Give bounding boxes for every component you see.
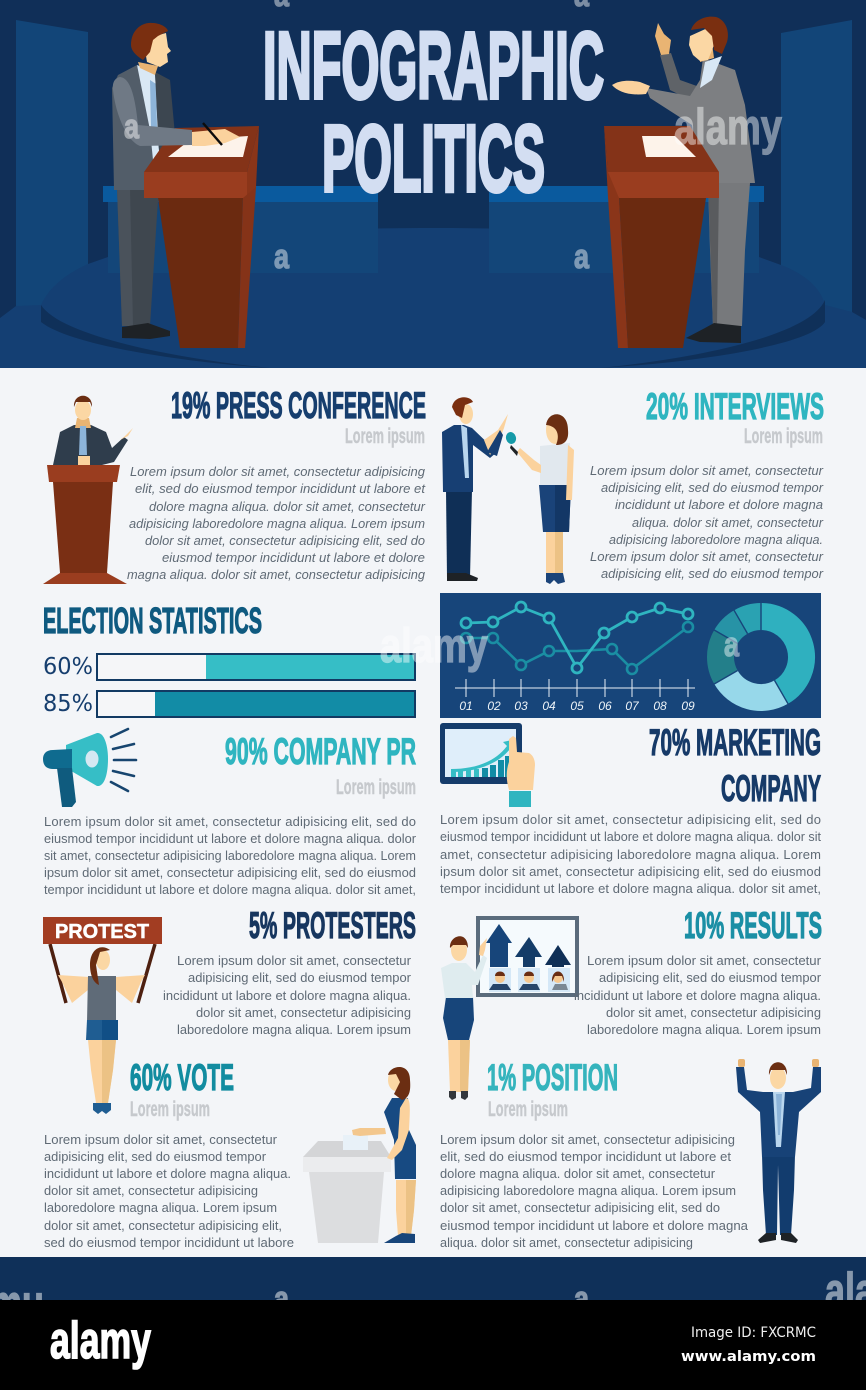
text block: magna aliqua. dolor sit amet, consectetur adipisicing	[127, 567, 426, 582]
footer band: a	[274, 1280, 290, 1318]
text block: dolor sit amet, consectetur adipisicing	[196, 1005, 411, 1020]
text block: dolor sit amet, consectetur adipisicing elit, sed do	[145, 533, 425, 548]
text block: aliqua. dolor sit amet, consectetur	[632, 515, 824, 530]
text block: elit, sed do eiusmod tempor incididunt ut labore et	[440, 1149, 731, 1164]
text block: eiusmod tempor incididunt ut labore et dolore	[162, 550, 425, 565]
heading: 19% press conference: 19% PRESS CONFERENCE	[171, 385, 426, 426]
icon: ballot box and voter	[303, 1067, 416, 1243]
donut chart	[714, 603, 801, 704]
text block: tempor incididunt ut labore et dolore magna aliqua. dolor sit amet,	[440, 881, 821, 896]
text block: incididunt ut labore et dolore magna aliqua.	[574, 988, 821, 1003]
text block: dolore magna aliqua. dolor sit amet, consectetur	[440, 1166, 716, 1181]
panel: interviews	[442, 386, 824, 584]
axis labels: 01	[459, 699, 473, 713]
left debater at podium	[112, 23, 175, 339]
text block	[163, 953, 412, 1037]
text block: adipisicing elit, sed do eiusmod tempor	[44, 1149, 267, 1164]
axis labels: 05	[570, 699, 584, 713]
axis labels: 08	[653, 699, 667, 713]
axis labels: 02	[487, 699, 501, 713]
text block: Lorem ipsum dolor sit amet, consectetur	[590, 549, 824, 564]
text block	[440, 1132, 749, 1250]
text block: dolore magna aliqua. dolor sit amet, consectetur	[149, 499, 426, 514]
chart axis	[455, 679, 695, 697]
text block: adipisicing elit, sed do eiusmod tempor	[601, 480, 824, 495]
panel: company PR	[43, 729, 417, 897]
watermark: alamy on header: a	[274, 238, 290, 276]
heading: 70% marketing company	[649, 722, 821, 809]
text block: incididunt ut labore et dolore magna aliqua.	[44, 1166, 291, 1181]
icon: victorious man	[736, 1059, 821, 1243]
text block	[574, 953, 822, 1037]
progress bar 85%: 85%	[43, 691, 93, 717]
text block: incididunt ut labore et dolore magna aliqua.	[163, 988, 411, 1003]
text block: laboredolore magna aliqua. Lorem ipsum	[587, 1022, 821, 1037]
subheading: Lorem ipsum	[336, 776, 416, 799]
panel: protesters	[43, 905, 416, 1114]
axis labels: 09	[681, 699, 695, 713]
axis labels: 06	[598, 699, 612, 713]
progress bar 60%: 60%	[43, 654, 93, 680]
panel: position	[440, 1057, 821, 1250]
panel: vote	[44, 1057, 416, 1250]
text block: adipisicing elit, sed do eiusmod tempor	[599, 970, 822, 985]
watermark: alamy on header: alamy	[674, 99, 782, 155]
text block: adipisicing laboredolore magna aliqua. Lorem ipsum	[440, 1183, 736, 1198]
stage floor	[0, 228, 866, 368]
right debater	[612, 17, 755, 343]
subheading: Lorem ipsum	[345, 425, 425, 448]
icon: press conference speaker	[43, 396, 133, 584]
left lectern	[144, 126, 259, 348]
panel: press conference	[43, 385, 426, 584]
website: www.alamy.com	[681, 1349, 816, 1365]
text block: dolor sit amet, consectetur adipisicing	[606, 1005, 821, 1020]
icon: interview figures	[442, 397, 574, 584]
icon: tablet with hand	[440, 723, 535, 807]
text block: elit, sed do eiusmod tempor incididunt ut labore et	[135, 481, 426, 496]
left table	[108, 200, 378, 273]
text block: dolor sit amet, consectetur adipisicing elit,	[44, 1218, 282, 1233]
text block: sed do eiusmod tempor incididunt ut labore	[44, 1235, 294, 1250]
text block: adipisicing elit, sed do eiusmod tempor	[188, 970, 412, 985]
text block: adipisicing laboredolore magna aliqua. Lorem ipsum	[129, 516, 425, 531]
header stage scene	[0, 0, 866, 368]
watermark: alamy on header: a	[124, 108, 140, 146]
icon: megaphone	[43, 729, 136, 807]
heading: 5% protesters: 5% PROTESTERS	[249, 905, 416, 946]
text block: laboredolore magna aliqua. Lorem ipsum	[44, 1200, 277, 1215]
text block: incididunt ut labore et dolore magna	[615, 497, 823, 512]
left debater arm and pen	[113, 77, 240, 146]
left door	[16, 20, 88, 320]
text block: Lorem ipsum dolor sit amet, consectetur adipisicing elit, sed do	[44, 814, 416, 829]
watermark on chart	[380, 620, 740, 673]
text block: Lorem ipsum dolor sit amet, consectetur adipisicing elit, sed do	[440, 812, 821, 827]
title	[263, 13, 604, 212]
text block: Lorem ipsum dolor sit amet, consectetur	[177, 953, 412, 968]
panel: election statistics	[43, 600, 415, 717]
text block: adipisicing laboredolore magna aliqua.	[609, 532, 823, 547]
text block: dolor sit amet, consectetur adipisicing	[44, 1183, 258, 1198]
text block	[44, 814, 417, 897]
subheading: Lorem ipsum	[130, 1098, 210, 1121]
icon: presenter and board	[441, 918, 577, 1100]
text block: Lorem ipsum dolor sit amet, consectetur adipisicing	[130, 464, 426, 479]
watermark on chart: a	[724, 626, 740, 664]
panel: marketing company	[440, 722, 821, 896]
text block: ipsum dolor sit amet, consectetur adipisicing elit, sed do eiusmod	[440, 864, 821, 879]
watermark: alamy on header	[124, 0, 782, 276]
watermark on chart: alamy	[380, 620, 488, 673]
line chart	[461, 602, 693, 674]
text block: sit amet, consectetur adipisicing laboredolore magna aliqua. Lorem	[44, 848, 416, 863]
text block: amet, consectetur adipisicing laboredolore magna aliqua. Lorem	[440, 847, 821, 862]
heading: 1% position: 1% POSITION	[487, 1057, 618, 1098]
text block	[44, 1132, 294, 1250]
icon: protester with sign	[43, 917, 162, 1114]
title: POLITICS	[322, 106, 545, 212]
footer band	[0, 1257, 866, 1331]
text block: Lorem ipsum dolor sit amet, consectetur adipisicing	[440, 1132, 735, 1147]
right door	[781, 20, 852, 320]
text block: adipisicing elit, sed do eiusmod tempor	[601, 566, 824, 581]
right lectern	[604, 126, 719, 348]
axis labels: 07	[625, 699, 640, 713]
footer band: a	[574, 1280, 590, 1318]
heading: 90% company PR: 90% COMPANY PR	[225, 731, 416, 772]
axis labels: 03	[514, 699, 528, 713]
text block: Lorem ipsum dolor sit amet, consectetur	[590, 463, 824, 478]
progress bar 60%	[43, 654, 415, 680]
subheading: Lorem ipsum	[488, 1098, 568, 1121]
icon: protester with sign: PROTEST	[55, 921, 149, 943]
panel: results	[441, 905, 822, 1100]
text block: ipsum dolor sit amet, consectetur adipisicing elit, sed do eiusmod	[44, 865, 416, 880]
axis labels	[459, 699, 695, 713]
bottom credit bar	[0, 1300, 866, 1390]
text block: tempor incididunt ut labore et dolore magna aliqua. dolor sit amet,	[44, 882, 416, 897]
text block: eiusmod tempor incididunt ut labore et dolore magna	[440, 1218, 749, 1233]
heading: 60% vote: 60% VOTE	[130, 1057, 234, 1098]
heading: election statistics: ELECTION STATISTICS	[43, 600, 262, 641]
text block: Lorem ipsum dolor sit amet, consectetur	[44, 1132, 278, 1147]
stage edge	[41, 300, 825, 368]
axis labels: 04	[542, 699, 556, 713]
right table	[489, 200, 759, 273]
panel: chart	[440, 593, 821, 718]
text block	[440, 812, 821, 896]
text block	[590, 463, 824, 581]
text block: eiusmod tempor incididunt ut labore et dolore magna aliqua. dolor sit	[440, 829, 821, 844]
text block: aliqua. dolor sit amet, consectetur adipisicing	[440, 1235, 693, 1250]
image id: Image ID: FXCRMC	[691, 1325, 816, 1341]
text block: laboredolore magna aliqua. Lorem ipsum	[177, 1022, 411, 1037]
watermark: alamy on header: a	[574, 238, 590, 276]
text block: eiusmod tempor incididunt ut labore et dolore magna aliqua. dolor	[44, 831, 417, 846]
text block: Lorem ipsum dolor sit amet, consectetur	[587, 953, 822, 968]
text block: dolor sit amet, consectetur adipisicing elit, sed do	[440, 1200, 720, 1215]
progress bar 85%	[43, 691, 415, 717]
alamy logo: alamy	[50, 1312, 151, 1370]
text block	[127, 464, 426, 582]
